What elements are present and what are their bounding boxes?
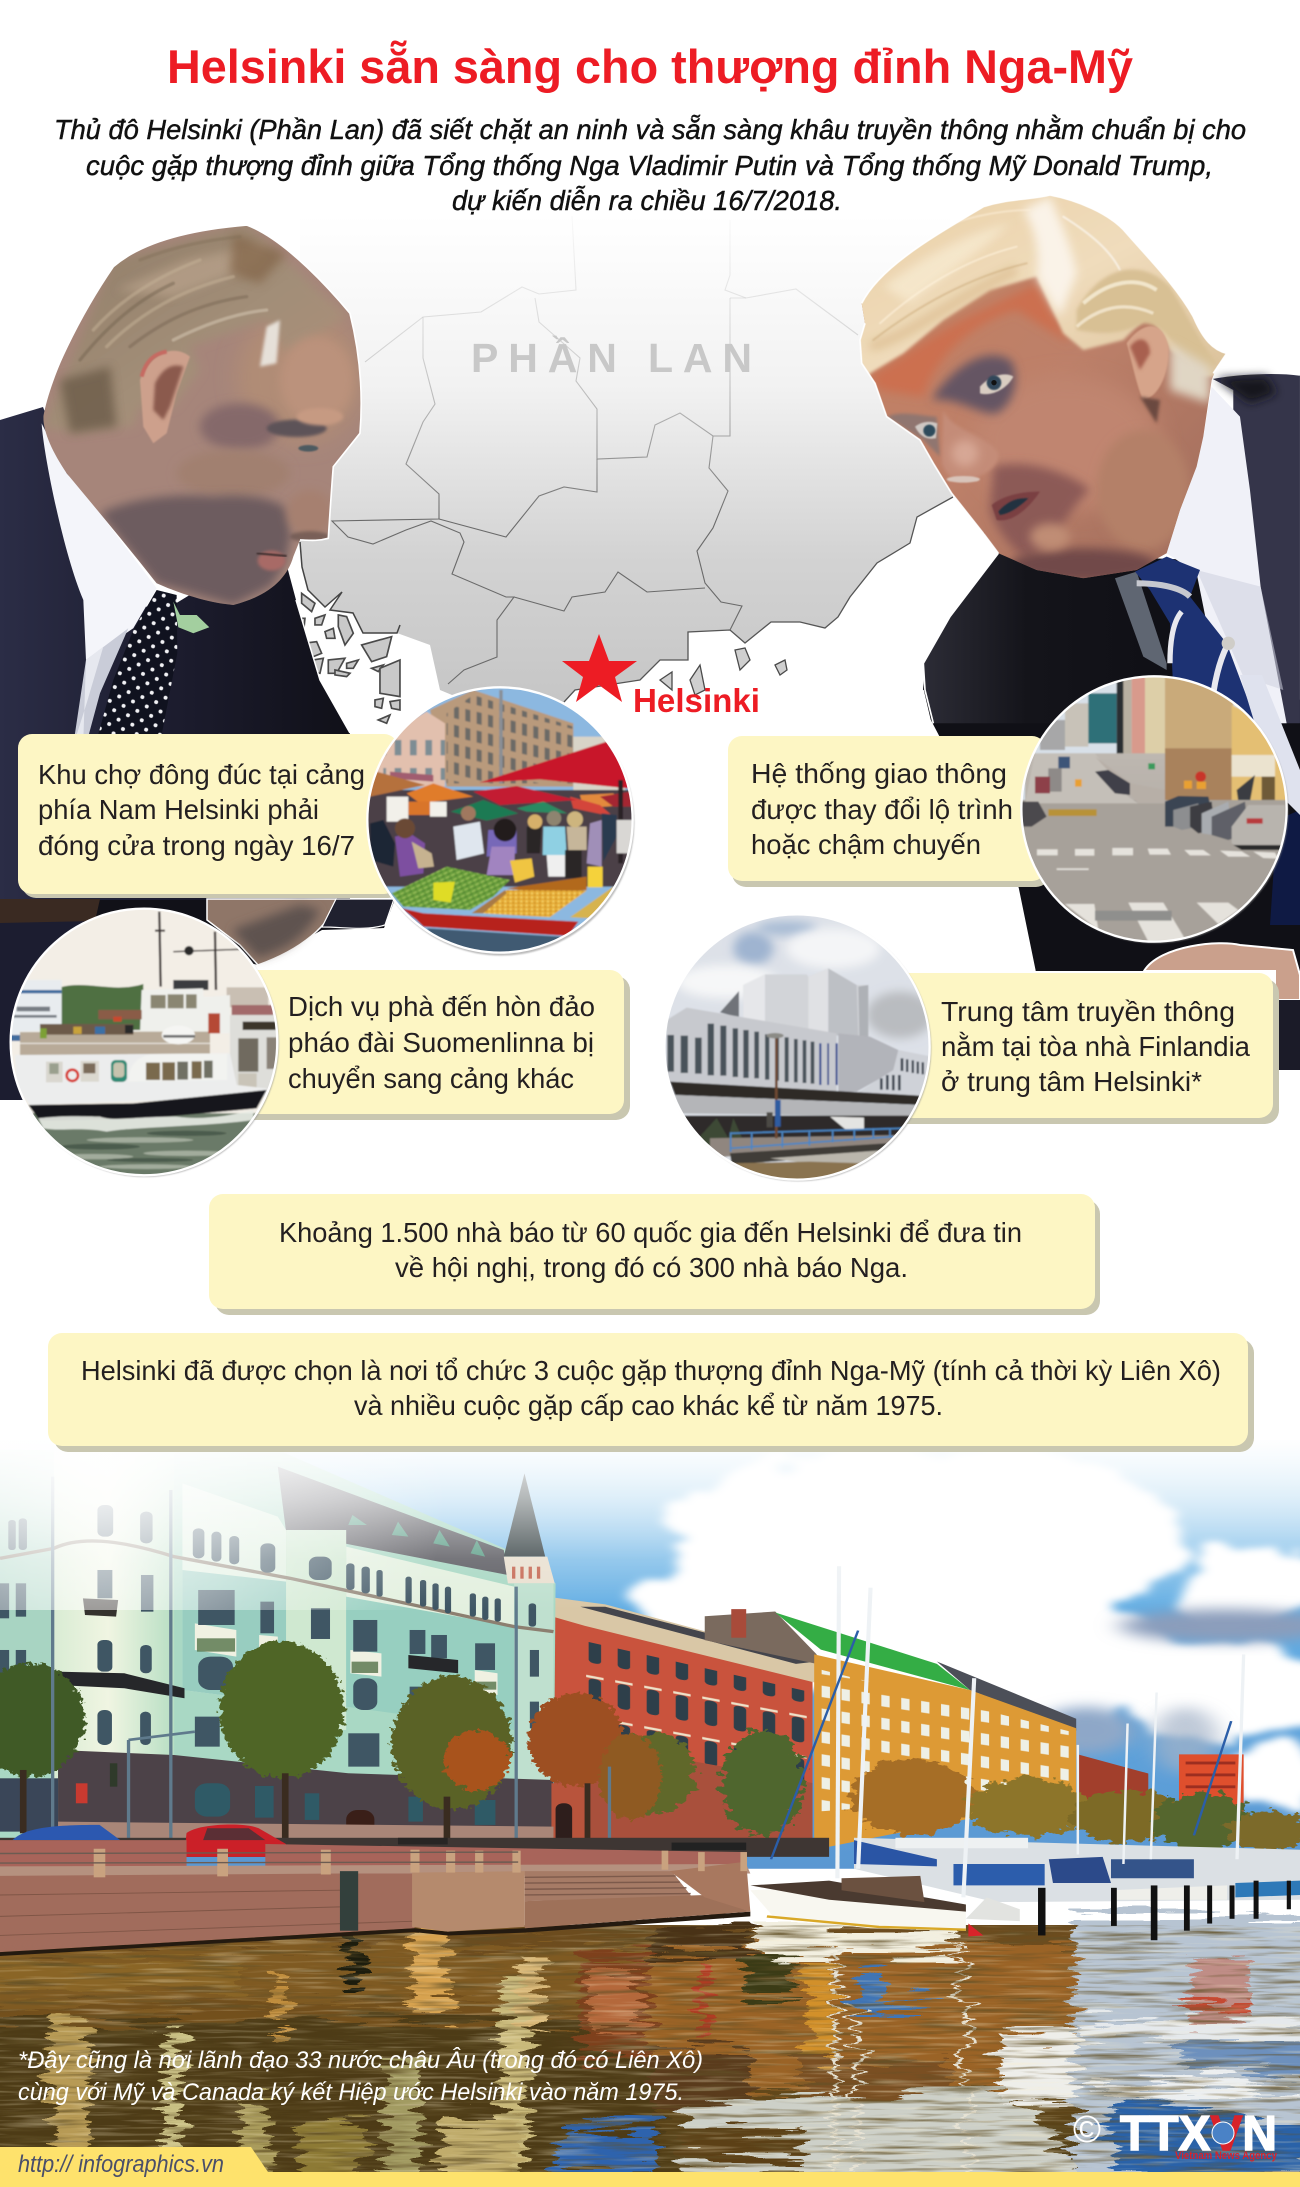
Putin head: [33, 220, 367, 620]
card: ferry: [230, 970, 630, 1120]
circle photo: traffic: [1020, 675, 1289, 944]
card: traffic: hoặc chậm chuyến: [751, 829, 981, 860]
photo: Trump: [850, 190, 1300, 1070]
Trump head: [850, 190, 1233, 590]
card: summit history: [48, 1333, 1254, 1452]
card: traffic: [728, 736, 1050, 887]
card: traffic: Hệ thống giao thông: [751, 758, 1007, 789]
photo: Putin: [0, 220, 395, 1100]
card: journalists: về hội nghị, trong đó có 300 nhà báo Nga.: [395, 1252, 908, 1283]
circle photo: market: [360, 680, 640, 960]
intro text block: dự kiến diễn ra chiều 16/7/2018.: [452, 185, 842, 216]
Trump shirt and tie: [1115, 387, 1287, 723]
TTXVN logo: ©: [1073, 2109, 1101, 2151]
card: ferry: chuyển sang cảng khác: [288, 1063, 574, 1094]
card: market: [18, 734, 402, 898]
photo: Helsinki harbour: [0, 1440, 1300, 2187]
footnote: cùng với Mỹ và Canada ký kết Hiệp ước Helsinki vào năm 1975.: [18, 2079, 684, 2106]
card: Finlandia: ở trung tâm Helsinki*: [941, 1066, 1202, 1097]
map of Finland: [299, 215, 953, 723]
Putin shirt and tie: [42, 423, 209, 740]
water with reflections: [0, 1915, 1300, 2187]
source tab: http:// infographics.vn: [18, 2151, 224, 2178]
card: journalists: [209, 1194, 1100, 1315]
card: market: phía Nam Helsinki phải: [38, 794, 319, 825]
intro text block: cuộc gặp thượng đỉnh giữa Tổng thống Nga Vladimir Putin và Tổng thống Mỹ Donald Trump,: [86, 150, 1213, 181]
red building: [551, 1597, 817, 1845]
card: summit history: và nhiều cuộc gặp cấp cao khác kể từ năm 1975.: [354, 1390, 943, 1421]
sky and clouds: [0, 1440, 1300, 1869]
card: Finlandia: [880, 973, 1279, 1124]
card: market: đóng cửa trong ngày 16/7: [38, 830, 355, 861]
TTXVN logo: Vietnam News Agency: [1175, 2150, 1278, 2162]
Trump suit lower: [923, 553, 1300, 971]
teal corner building: [0, 1450, 661, 1850]
map islands: [299, 593, 400, 723]
street and cars: [0, 1825, 829, 1857]
intro text block: Thủ đô Helsinki (Phần Lan) đã siết chặt an ninh và sẵn sàng khâu truyền thông nhằm chuẩn bị cho: [54, 114, 1246, 145]
map label: PHẦN LAN: [471, 335, 760, 381]
Helsinki marker star: [562, 634, 637, 702]
card: summit history: Helsinki đã được chọn là nơi tổ chức 3 cuộc gặp thượng đỉnh Nga-Mỹ (tính cả thời kỳ Liên Xô): [81, 1355, 1221, 1386]
card: Finlandia: nằm tại tòa nhà Finlandia: [941, 1031, 1250, 1062]
Trump lower suit and hand: [1144, 675, 1300, 1070]
TTXVN logo: TTXVN: [1120, 2107, 1277, 2161]
card: Finlandia: Trung tâm truyền thông: [941, 996, 1235, 1027]
orange building and green roof: [705, 1609, 1244, 1850]
intro text block: [54, 114, 1246, 216]
card: ferry: pháo đài Suomenlinna bị: [288, 1027, 594, 1058]
bottom strip: [0, 2172, 1300, 2187]
card: ferry: Dịch vụ phà đến hòn đảo: [288, 991, 595, 1022]
quay wall and steps: [0, 1840, 750, 1956]
trees right: [614, 1731, 1300, 1850]
Helsinki label: Helsinki: [633, 682, 760, 719]
footnote: [18, 2047, 703, 2106]
title: Helsinki sẵn sàng cho thượng đỉnh Nga-Mỹ: [167, 40, 1133, 93]
circle photo: ferry: [10, 908, 280, 1178]
boats and masts: [750, 1566, 1300, 1940]
card: traffic: được thay đổi lộ trình: [751, 794, 1013, 825]
Trump jacket: [923, 373, 1300, 723]
footnote: *Đây cũng là nơi lãnh đạo 33 nước châu Âu (trong đó có Liên Xô): [18, 2047, 703, 2074]
circle photo: Finlandia Hall: [666, 916, 932, 1182]
card: market: Khu chợ đông đúc tại cảng: [38, 759, 365, 790]
map region borders: [332, 216, 858, 684]
Putin suit: [0, 407, 395, 1100]
card: journalists: Khoảng 1.500 nhà báo từ 60 quốc gia đến Helsinki để đưa tin: [279, 1217, 1022, 1248]
